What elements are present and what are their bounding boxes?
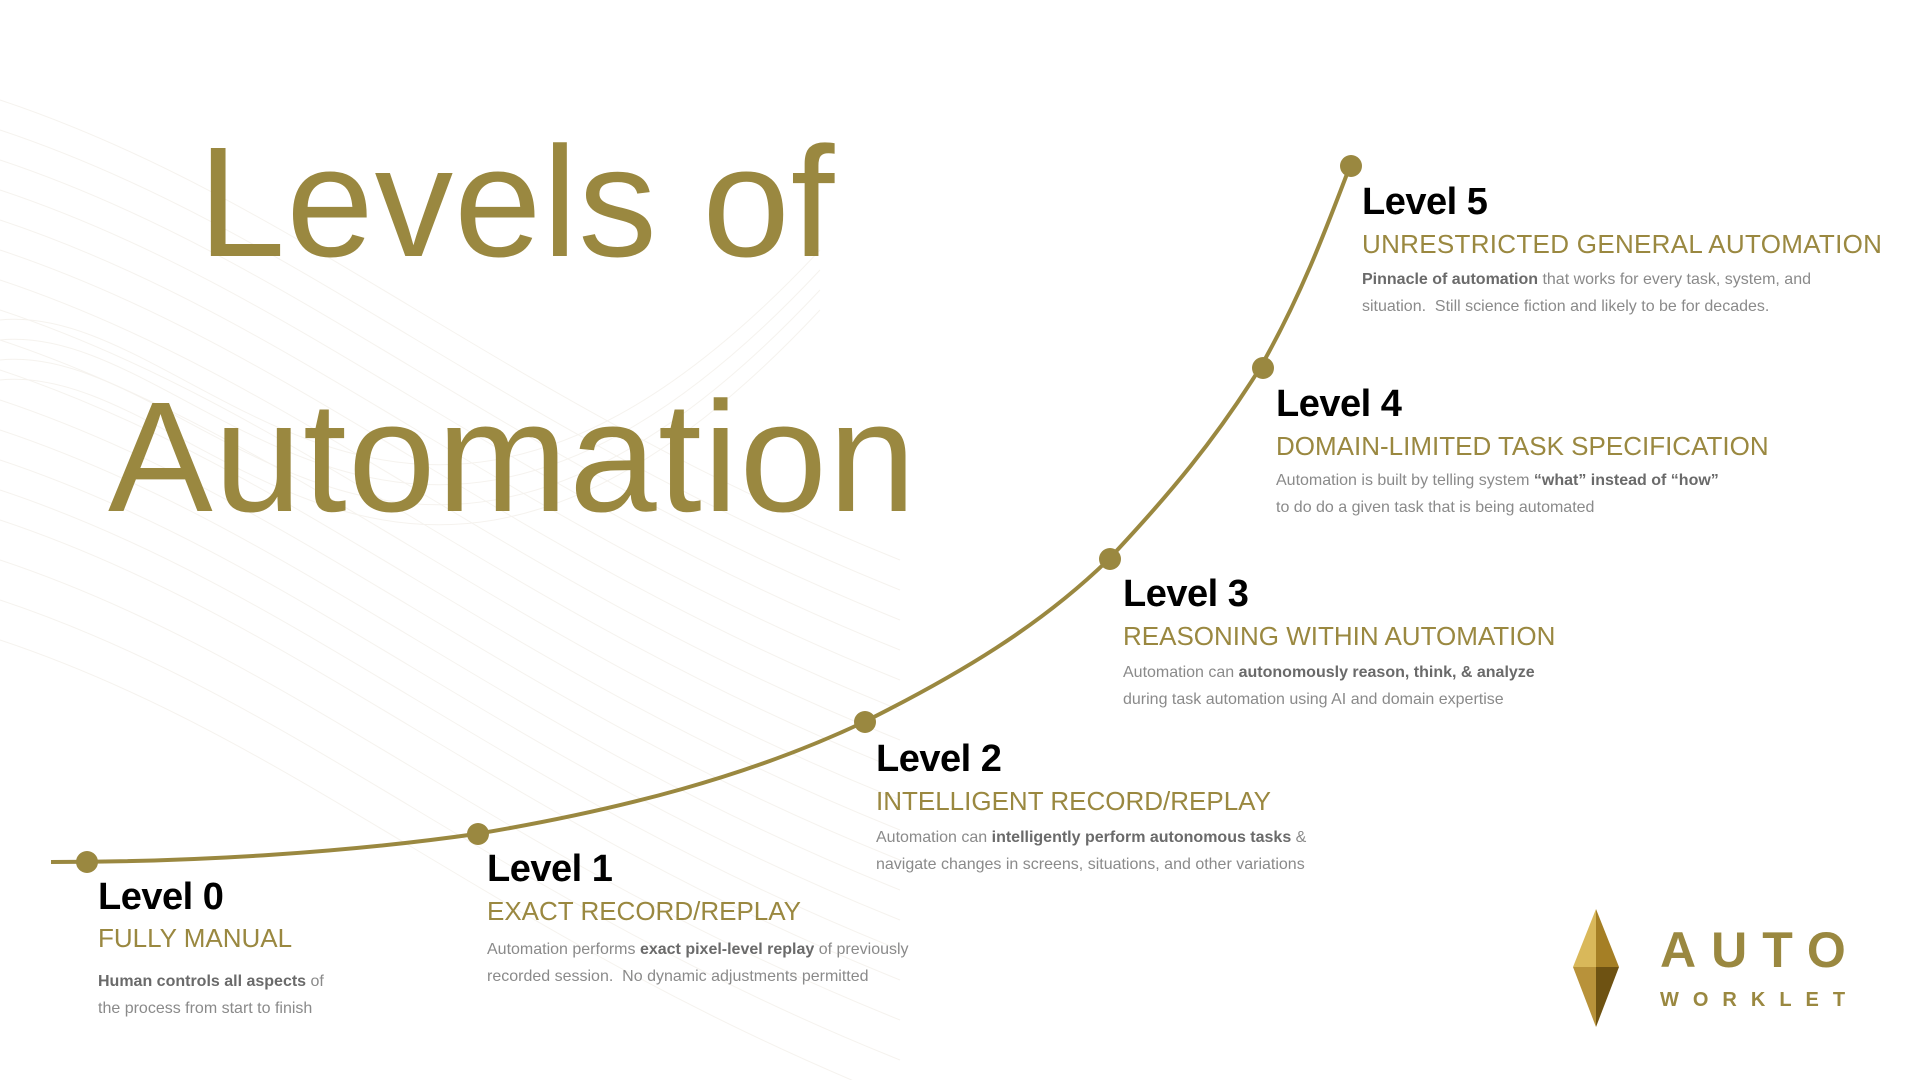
level 3: during task automation using AI and domain expertise xyxy=(1123,691,1504,708)
wordmark: AUTO xyxy=(1660,922,1861,978)
level 5: Level 5 xyxy=(1362,181,1487,223)
title: Levels of xyxy=(198,115,835,290)
title xyxy=(108,115,917,545)
level 3: REASONING WITHIN AUTOMATION xyxy=(1123,621,1555,651)
level 0: the process from start to finish xyxy=(98,1000,312,1017)
level 2: Level 2 xyxy=(876,738,1001,780)
level 4: DOMAIN-LIMITED TASK SPECIFICATION xyxy=(1276,431,1769,461)
level 4 xyxy=(1276,383,1769,516)
level 5: UNRESTRICTED GENERAL AUTOMATION xyxy=(1362,229,1882,259)
level 5: situation. Still science fiction and likely to be for decades. xyxy=(1362,298,1769,315)
level 1 xyxy=(487,848,909,985)
level 2: INTELLIGENT RECORD/REPLAY xyxy=(876,786,1271,816)
level 1: recorded session. No dynamic adjustments permitted xyxy=(487,968,869,985)
logo: WORKLET xyxy=(1660,989,1859,1011)
level 0: Human controls all aspects of xyxy=(98,973,324,990)
level 0: Level 0 xyxy=(98,876,223,918)
logo xyxy=(1573,909,1861,1027)
title: Automation xyxy=(108,370,917,545)
level 3: Automation can autonomously reason, think, & analyze xyxy=(1123,664,1535,681)
level 1: EXACT RECORD/REPLAY xyxy=(487,896,801,926)
icon: gold diamond xyxy=(1573,909,1619,1027)
level 2 xyxy=(876,738,1306,873)
level 0: FULLY MANUAL xyxy=(98,923,292,953)
level 2: navigate changes in screens, situations, and other variations xyxy=(876,856,1305,873)
level 0 xyxy=(98,876,324,1017)
level 4: Automation is built by telling system “what” instead of “how” xyxy=(1276,472,1719,489)
level 3 xyxy=(1123,573,1555,708)
level 1: Automation performs exact pixel-level replay of previously xyxy=(487,941,909,958)
level 2: Automation can intelligently perform autonomous tasks & xyxy=(876,829,1306,846)
level 1: Level 1 xyxy=(487,848,612,890)
level 3: Level 3 xyxy=(1123,573,1248,615)
level 5 xyxy=(1362,181,1882,315)
level 4: to do do a given task that is being automated xyxy=(1276,499,1594,516)
level 4: Level 4 xyxy=(1276,383,1401,425)
level 5: Pinnacle of automation that works for every task, system, and xyxy=(1362,271,1811,288)
